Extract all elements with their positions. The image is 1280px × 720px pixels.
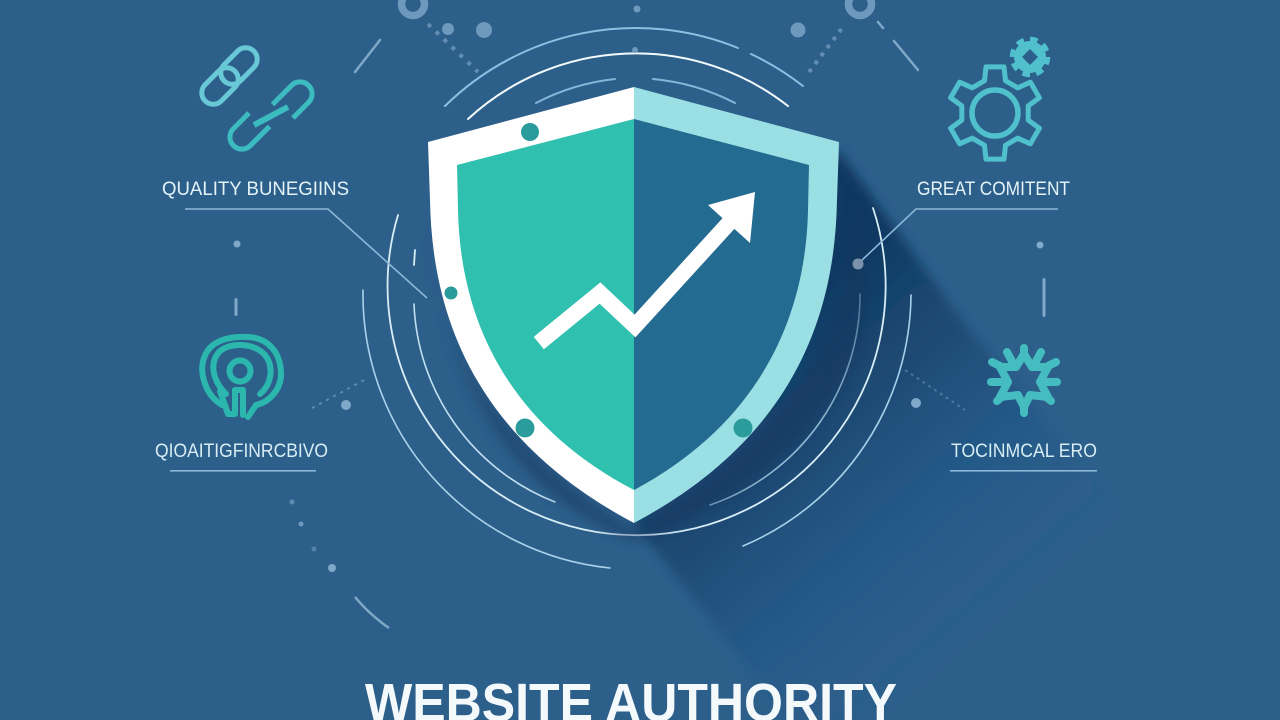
shield rivets (444, 123, 752, 438)
long shadow of shield (634, 150, 1160, 720)
label: QUALITY BUNEGIINS (162, 179, 349, 200)
connector line (185, 209, 427, 298)
decorative side dots and dashes (234, 240, 1046, 628)
shield rim right (634, 87, 839, 523)
icon: star cog (991, 348, 1057, 413)
callout: technical seo (950, 348, 1097, 472)
shield panel right (634, 119, 809, 490)
shield panel left (457, 119, 634, 490)
icon: small gear (1012, 40, 1048, 74)
connector dot (852, 258, 864, 270)
callout: quality branding (155, 337, 328, 472)
concentric arcs around shield (363, 28, 911, 568)
connector line (860, 209, 1058, 262)
shield rim left (428, 87, 634, 523)
icon: chain links (197, 43, 317, 154)
growth arrow (545, 192, 755, 338)
label: GREAT COMITENT (917, 179, 1070, 200)
underline (170, 470, 316, 472)
icon: large gear (951, 67, 1039, 159)
label: QIOAITIGFINRCBIVO (155, 441, 328, 462)
callout: quality backlinks (162, 43, 427, 298)
underline (950, 470, 1097, 472)
callout: great content (852, 40, 1070, 270)
shield soft shadow (430, 180, 870, 540)
shield (428, 87, 870, 540)
icon: swirl (202, 337, 281, 417)
decorative top nodes and ticks (355, 0, 918, 72)
label: TOCINMCAL ERO (951, 441, 1097, 462)
